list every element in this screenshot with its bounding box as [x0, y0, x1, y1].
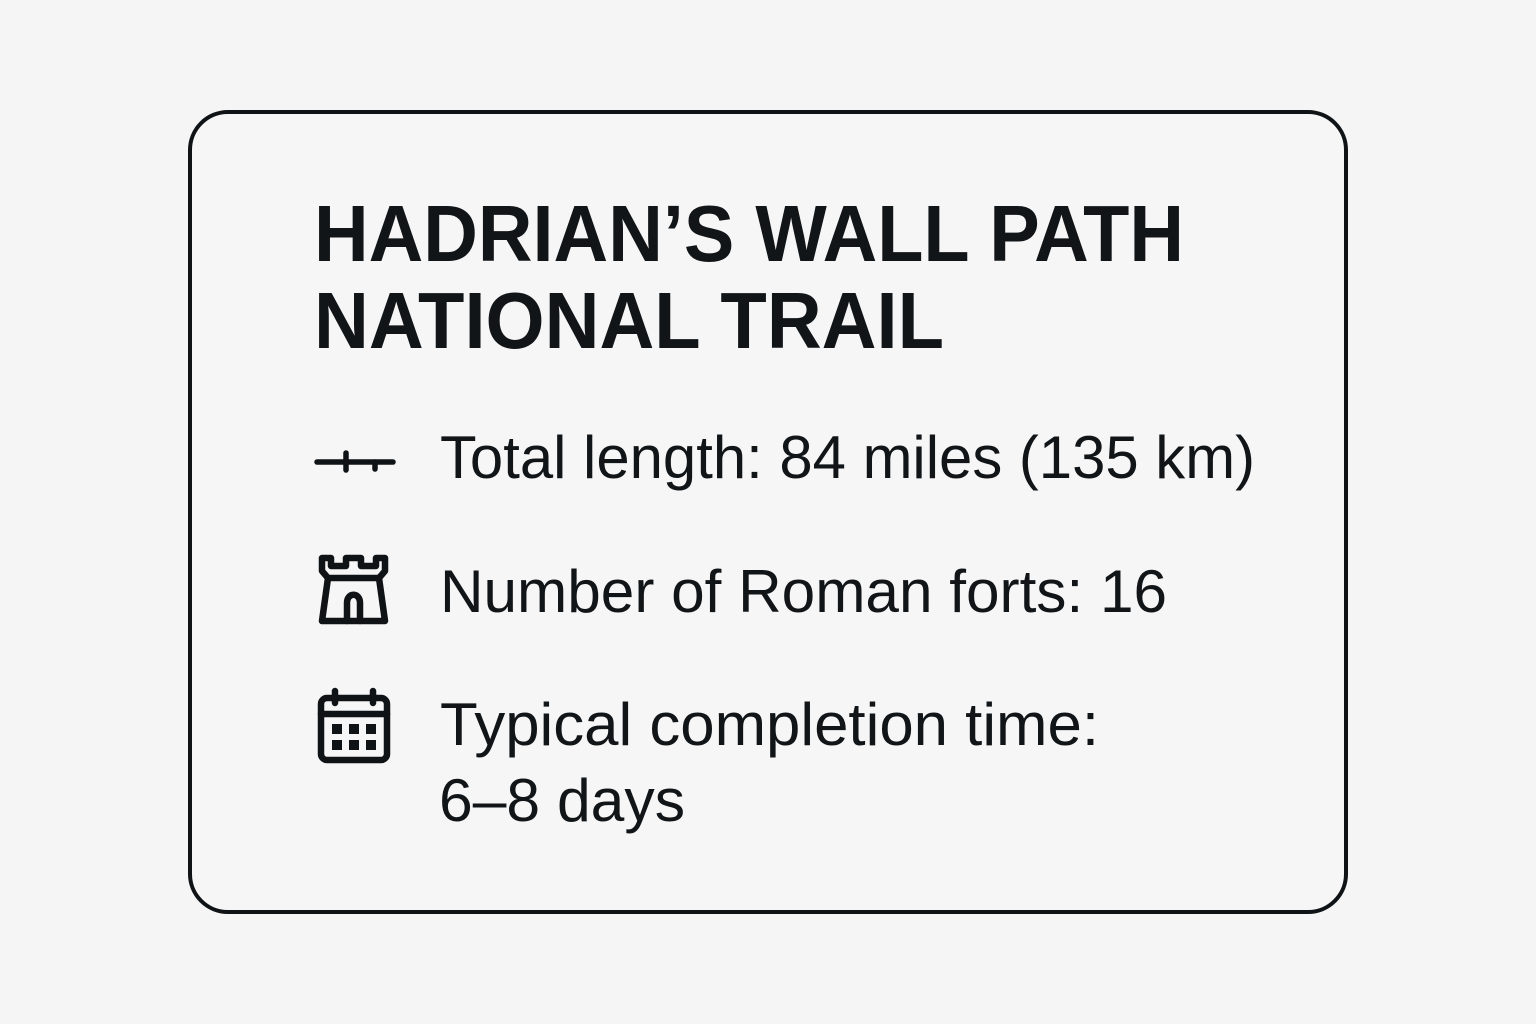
icon: castle fort [322, 558, 385, 621]
text: number of forts: Number of Roman forts: 16 [440, 558, 1167, 625]
title [314, 189, 1184, 365]
text: typical completion time: 6–8 days [439, 767, 685, 834]
icon: wall length line [317, 453, 393, 470]
text: total length: Total length: 84 miles (135 km) [440, 424, 1255, 491]
panel: trail facts card [190, 112, 1346, 912]
title: HADRIAN’S WALL PATH [314, 189, 1184, 278]
icon: calendar [321, 691, 387, 760]
text: typical completion time: Typical completion time: [440, 691, 1099, 758]
title: NATIONAL TRAIL [314, 276, 944, 365]
text: typical completion time [439, 691, 1099, 834]
